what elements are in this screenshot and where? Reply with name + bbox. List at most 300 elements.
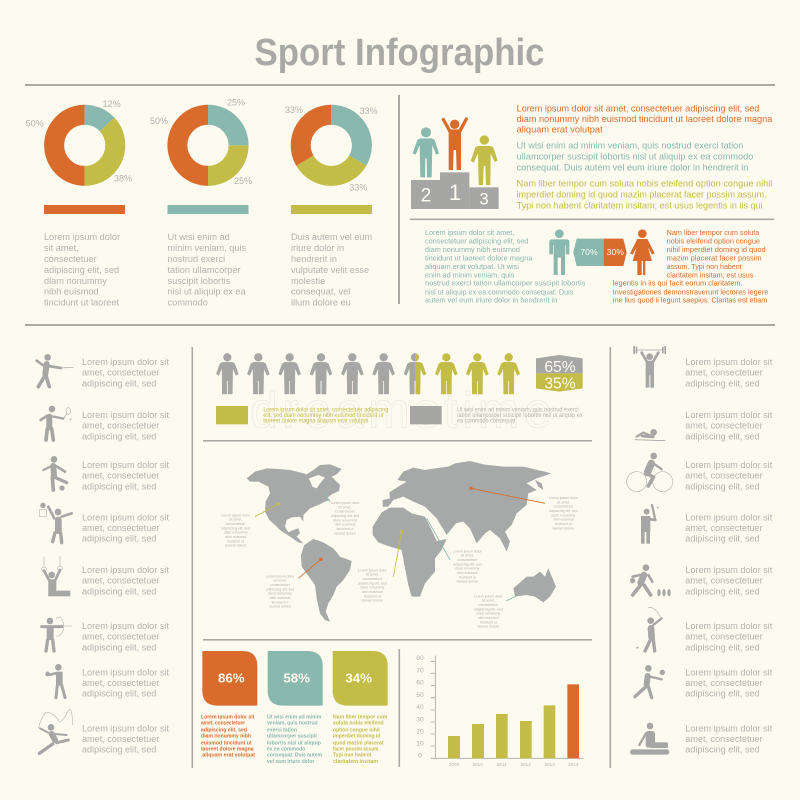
text block olive: [517, 179, 772, 210]
right list upper text: amet, consectetuer: [685, 471, 763, 481]
donut percentage labels: 33%: [360, 106, 378, 116]
left list lower text: adipiscing elit, sed: [82, 586, 156, 596]
map callout text E: tincidunt ut: [459, 575, 476, 579]
map callout text B: diam nonummy: [333, 518, 357, 522]
map callout text B: consectetuer: [335, 510, 356, 514]
left list upper text: amet, consectetuer: [82, 471, 159, 481]
icon: second place figure: [413, 127, 439, 177]
legend olive text: elit, sed diam nonummy nibh euismod tincidunt ut: [263, 413, 384, 419]
percentage badge: 65%: [544, 359, 576, 376]
y axis labels: 80: [416, 655, 424, 662]
right list upper text: adipiscing elit, sed: [685, 378, 760, 388]
donut text column 2: minim veniam, quis: [168, 243, 247, 253]
icon: fencing: [37, 354, 73, 387]
donut text column 1: diam nonummy: [44, 276, 107, 286]
icon: tennis: [41, 406, 71, 440]
stat card 34%: [333, 651, 388, 706]
text block teal: [517, 141, 753, 172]
text block gender orange: nobis eleifend option congue: [667, 236, 760, 245]
map callout text D: Lorem ipsum dolor: [358, 568, 388, 572]
text block gender teal: consectetuer adipiscing elit, sed: [425, 236, 528, 245]
percentage badge: 35%: [544, 376, 576, 393]
stat text orange: amet, consectetuer: [201, 721, 246, 727]
stat text teal: veniam, quis nostrud: [267, 721, 318, 727]
donut text column 3: iriure dolor in: [291, 243, 344, 253]
donut text column 2: suscipit lobortis: [168, 276, 231, 286]
donut percentage labels: [26, 97, 378, 193]
chart axes: [431, 656, 583, 758]
gender ratio badge: [573, 239, 627, 266]
icon: man figure: [549, 229, 569, 275]
donut text column 2: nostrud exerci: [168, 254, 225, 264]
map callout text G: laoreet dolore: [478, 625, 499, 629]
donut text column 2: tation ullamcorper: [168, 265, 241, 275]
stat text teal: lobortis nisl ut aliquip: [267, 740, 322, 746]
left list upper text: Lorem ipsum dolor sit: [82, 460, 169, 470]
right list lower text: adipiscing elit, sed: [685, 689, 760, 699]
map callout text E: consectetuer: [457, 558, 478, 562]
map callout text G: adipiscing elit, sed: [474, 607, 503, 611]
map callout text F: adipiscing elit, sed: [549, 509, 578, 513]
map callout text G: [474, 594, 504, 629]
left list lower text: amet, consectetuer: [82, 734, 159, 744]
donut text column 1: tincidunt ut laoreet: [44, 298, 120, 308]
donut text column 2: nisl ut aliquip ex ea: [168, 287, 247, 297]
icon: rhythmic gymnastics: [38, 710, 73, 753]
donut text column 2: commodo: [168, 298, 208, 308]
panel: right sports list: [627, 346, 773, 755]
stat text teal: exerci tation: [267, 727, 298, 733]
donut text column 3: [291, 232, 373, 308]
colour bar teal: [168, 205, 248, 214]
x axis labels: 2009: [449, 762, 460, 767]
map callout text E: laoreet dolore: [457, 580, 478, 584]
map callout text B: tincidunt ut: [337, 527, 353, 531]
Old world: [373, 461, 556, 602]
donut percentage labels: 50%: [150, 116, 168, 126]
donut text column 1: nibh euismod: [44, 287, 99, 297]
icon: seated fitness: [630, 723, 669, 755]
left list upper text: adipiscing elit, sed: [82, 481, 156, 491]
map callout text F: sit amet,: [557, 500, 570, 504]
text block gender teal: diam nonummy nibh euismod: [425, 245, 520, 254]
text block gender teal: aliquam erat volutpat. Ut wisi: [425, 262, 519, 271]
left list upper text: adipiscing elit, sed: [82, 431, 156, 441]
y axis labels: 10: [416, 741, 424, 748]
map callout text B: Lorem ipsum dolor: [331, 501, 360, 505]
stat text olive: imperdiet doming id: [333, 734, 380, 740]
stat text teal: vel eum iriure dolor: [267, 759, 315, 765]
icon: swimming: [635, 429, 665, 441]
donut text column 2: [168, 232, 247, 308]
map callout text D: diam nonummy: [360, 586, 384, 590]
text block gender orange: Investigationes demonstraverunt lectores legere: [613, 287, 768, 296]
percentage badge: [536, 355, 583, 393]
text block gender teal: [425, 228, 586, 305]
left list upper text: amet, consectetuer: [82, 368, 159, 378]
panel: donut charts: [26, 97, 378, 308]
map callout text C: laoreet dolore: [269, 605, 291, 609]
map callout text G: sit amet,: [482, 599, 495, 603]
map callout text C: tincidunt ut: [272, 600, 288, 604]
donut text column 3: Duis autem vel eum: [291, 232, 373, 242]
stat text teal: [267, 714, 322, 765]
icon: podium: 1: [449, 180, 461, 205]
left list upper text: Lorem ipsum dolor sit: [82, 512, 169, 522]
map callout text E: [453, 549, 483, 584]
donut text column 1: [44, 232, 120, 308]
Africa: [373, 508, 447, 597]
right list lower text: [685, 565, 773, 755]
text block gender teal: nisl ut aliquip ex ea commodo consequat. Duis: [425, 287, 574, 296]
x axis labels: [449, 762, 579, 767]
donut percentage labels: 33%: [285, 105, 303, 115]
map callout text F: laoreet dolore: [553, 526, 574, 530]
donut text column 3: vulputate velit esse: [291, 265, 369, 275]
map callout text A: consectetuer: [226, 522, 246, 526]
bars: [448, 684, 579, 758]
map callout text G: consectetuer: [478, 603, 499, 607]
right list lower text: Lorem ipsum dolor sit: [685, 723, 773, 733]
icon: woman figure: [630, 229, 655, 275]
text block teal: Ut wisi enim ad minim veniam, quis nostrud exerci tation: [517, 141, 743, 151]
map callout text F: nibh euismod: [553, 518, 574, 522]
icon: bowling: [630, 564, 671, 596]
world map: [239, 461, 556, 622]
donut chart 1: [54, 115, 115, 176]
right list lower text: amet, consectetuer: [685, 678, 763, 688]
colour bar olive: [291, 205, 372, 214]
donut percentage labels: 12%: [103, 99, 121, 109]
map callout text C: consectetuer: [270, 583, 291, 587]
stat text orange: adipiscing elit, sed: [201, 727, 247, 733]
stat text teal: consequat. Duis autem: [267, 753, 322, 759]
right list lower text: amet, consectetuer: [685, 576, 763, 586]
icon: volleyball: [635, 665, 665, 698]
right list upper icons: [627, 346, 673, 544]
right list lower icons: [630, 564, 671, 755]
stat text orange: [201, 714, 255, 759]
y axis labels: 50: [416, 692, 424, 699]
Hudson bay cutout: [309, 475, 325, 488]
map callout text E: diam nonummy: [455, 567, 479, 571]
people row pictogram: [216, 353, 520, 394]
text block gender orange: assum. Typi non habent: [667, 262, 742, 271]
map callout text E: sit amet,: [461, 554, 474, 558]
left list lower text: Lorem ipsum dolor sit: [82, 621, 169, 631]
icon: cycling: [627, 453, 673, 492]
map callout text C: nibh euismod: [270, 596, 290, 600]
legend olive text: laoreet dolore magna aliquam erat volutpat: [263, 419, 369, 425]
panel: centre people and map: [216, 353, 583, 629]
right list lower text: amet, consectetuer: [685, 632, 763, 642]
right list lower text: Lorem ipsum dolor sit: [685, 565, 773, 575]
colour bar orange: [44, 205, 125, 214]
legend grey square: [410, 406, 442, 424]
donut percentage labels: 50%: [26, 118, 44, 128]
icon: boxing: [45, 664, 65, 698]
donut text column 1: sit amet,: [44, 243, 79, 253]
map pointers: [255, 487, 545, 601]
text block gender orange: Nam liber tempor cum soluta: [667, 228, 760, 237]
stat text olive: option congue nihil: [333, 727, 380, 733]
donut chart 2: [177, 115, 239, 176]
left list lower text: [82, 565, 169, 755]
left list lower text: adipiscing elit, sed: [82, 642, 156, 652]
text block orange: diam nonummy nibh euismod tincidunt ut laoreet dolore magna: [517, 114, 773, 124]
map callout text C: adipiscing elit, sed: [266, 587, 294, 591]
legend grey text: [457, 407, 583, 425]
x axis labels: 2011: [497, 762, 507, 767]
map callout text C: sit amet,: [273, 579, 287, 583]
right list lower text: adipiscing elit, sed: [685, 586, 760, 596]
donut percentage labels: 33%: [349, 183, 367, 193]
map callout text D: adipiscing elit, sed: [358, 581, 387, 585]
map callout text D: sit amet,: [366, 573, 379, 577]
stat card 34%: 34%: [345, 671, 372, 686]
text block gender orange: nihil imperdiet doming id quod: [667, 245, 766, 254]
right list upper text: adipiscing elit, sed: [685, 431, 760, 441]
gender ratio badge: 30%: [607, 247, 624, 257]
text block orange: Lorem ipsum dolor sit amet, consectetuer adipiscing elit, sed: [517, 103, 759, 113]
map callout text F: diam nonummy: [551, 513, 575, 517]
map callout text C: Lorem ipsum dolor: [266, 574, 295, 578]
stat text olive: quod mazim placerat: [333, 740, 384, 746]
left list upper text: [82, 357, 169, 544]
icon: archery: [42, 617, 72, 651]
map callout text B: adipiscing elit, sed: [331, 514, 359, 518]
bar chart: [416, 655, 583, 767]
left list lower text: adipiscing elit, sed: [82, 745, 156, 755]
Japan: [535, 480, 543, 490]
donut percentage labels: 38%: [114, 173, 132, 183]
panel: bottom stats and bar chart: [201, 651, 583, 767]
text block orange: [517, 103, 773, 135]
icon: podium: 3: [479, 189, 489, 208]
map callout text A: diam nonummy: [224, 531, 248, 535]
right list lower text: adipiscing elit, sed: [685, 745, 760, 755]
y axis labels: 30: [416, 716, 424, 723]
map callout text A: nibh euismod: [225, 535, 246, 539]
stat text olive: [333, 714, 387, 765]
legend olive square: [216, 406, 248, 424]
watermark: dreamstime: [250, 382, 552, 438]
Australia: [513, 568, 556, 602]
left list upper text: Lorem ipsum dolor sit: [82, 357, 169, 367]
right list lower text: Lorem ipsum dolor sit: [685, 621, 773, 631]
donut text column 2: Ut wisi enim ad: [168, 232, 230, 242]
map callout text G: nibh euismod: [478, 616, 499, 620]
right list upper text: amet, consectetuer: [685, 421, 763, 431]
y axis labels: 0: [418, 753, 422, 760]
map callout text B: sit amet,: [338, 505, 352, 509]
x axis labels: 2010: [472, 762, 483, 767]
stat card 58%: 58%: [283, 671, 310, 686]
map callout text A: Lorem ipsum dolor: [221, 513, 251, 517]
map callout text F: [549, 496, 579, 530]
map callout text G: diam nonummy: [476, 612, 500, 616]
icon: third place figure: [471, 135, 498, 185]
map callout text B: [331, 501, 360, 535]
map callout text B: nibh euismod: [335, 523, 355, 527]
title: Sport Infographic: [254, 32, 544, 74]
stat card 86%: [202, 651, 257, 706]
text block gender teal: Lorem ipsum dolor sit amet,: [425, 228, 514, 237]
left list upper text: amet, consectetuer: [82, 421, 159, 431]
y axis labels: 40: [416, 704, 424, 711]
panel: podium and text: [411, 103, 773, 305]
stat text olive: Nam liber tempor cum: [333, 714, 387, 720]
stat text orange: euismod tincidunt ut: [201, 740, 252, 746]
map callout text D: consectetuer: [362, 577, 383, 581]
map callout text D: nibh euismod: [362, 590, 383, 594]
right list upper text: Lorem ipsum dolor sit: [685, 410, 773, 420]
stat card 86%: 86%: [218, 671, 245, 686]
map callout text C: diam nonummy: [268, 592, 292, 596]
map callout text D: laoreet dolore: [362, 599, 383, 603]
donut text column 3: consequat, vel: [291, 287, 350, 297]
left list lower text: amet, consectetuer: [82, 632, 159, 642]
text block gender orange: [613, 228, 768, 305]
donut text column 3: molestie: [291, 276, 325, 286]
donut chart 3: [301, 115, 362, 176]
map callout text A: tincidunt ut: [227, 539, 244, 543]
legend grey text: ea commodo consequat: [457, 419, 516, 425]
icon: golf: [636, 607, 662, 651]
legend grey text: Ut wisi enim ad minim veniam, quis nostrud exerci: [457, 407, 579, 413]
stat text teal: ex ea commodo: [267, 746, 306, 752]
left list lower icons: [38, 556, 73, 753]
text block olive: Nam liber tempor cum soluta nobis eleifend option congue nihil: [517, 179, 772, 189]
icon: basketball: [40, 503, 72, 543]
right list upper text: Lorem ipsum dolor sit: [685, 460, 773, 470]
map callout text E: adipiscing elit, sed: [453, 562, 482, 566]
icon: podium: [411, 172, 499, 209]
donut text column 1: adipiscing elit, sed: [44, 265, 119, 275]
text block teal: ullamcorper suscipit lobortis nisl ut aliquip ex ea commodo: [517, 152, 753, 162]
icon: gymnastic rings: [42, 556, 70, 596]
icon: weightlifting: [633, 346, 666, 388]
stat text orange: laoreet dolore magna: [201, 746, 255, 752]
left list upper icons: [37, 354, 73, 543]
right list lower text: adipiscing elit, sed: [685, 642, 760, 652]
map callout text C: [266, 574, 295, 609]
left list lower text: amet, consectetuer: [82, 576, 159, 586]
donut text column 1: Lorem ipsum dolor: [44, 232, 120, 242]
y axis labels: 60: [416, 680, 424, 687]
North America: [239, 464, 342, 543]
map callout text G: tincidunt ut: [480, 620, 497, 624]
map callout text A: laoreet dolore: [225, 544, 246, 548]
stat text orange: diam nonummy nibh: [201, 734, 252, 740]
icon: soccer: [43, 456, 67, 491]
text block orange: aliquam erat volutpat: [517, 125, 603, 135]
map callout text D: tincidunt ut: [364, 594, 381, 598]
y axis labels: 70: [416, 667, 424, 674]
map callout text A: sit amet,: [229, 518, 242, 522]
donut text column 1: consectetuer: [44, 254, 97, 264]
right list lower text: Lorem ipsum dolor sit: [685, 667, 773, 677]
map callout text A: adipiscing elit, sed: [221, 526, 250, 530]
Americas: [239, 464, 352, 622]
map callout text F: Lorem ipsum dolor: [549, 496, 579, 500]
map callout text E: Lorem ipsum dolor: [453, 549, 483, 553]
stat text orange: .aliquam erat volutpat: [201, 753, 255, 759]
stat text olive: soluta nobis eleifend: [333, 721, 384, 727]
map callout text B: laoreet dolore: [334, 531, 356, 535]
y axis labels: [416, 655, 424, 760]
left list upper text: adipiscing elit, sed: [82, 378, 156, 388]
map callout text D: [358, 568, 388, 603]
text block teal: consequat. Duis autem vel eum iriure dolor in hendrerit in: [517, 162, 748, 172]
right list upper text: Lorem ipsum dolor sit: [685, 357, 773, 367]
right list upper text: Lorem ipsum dolor sit: [685, 512, 773, 522]
left list lower text: adipiscing elit, sed: [82, 689, 156, 699]
map callout text A: [221, 513, 251, 548]
map callout text G: Lorem ipsum dolor: [474, 594, 504, 598]
icon: first place figure: [441, 117, 468, 170]
text block gender teal: autem vel eum iriure dolor in hendrerit in: [425, 296, 557, 305]
text block gender orange: mazim placerat facer possim: [667, 253, 762, 262]
stat text olive: Typi non habent: [333, 753, 371, 759]
left list lower text: amet, consectetuer: [82, 678, 159, 688]
stat text olive: facer possim assum.: [333, 746, 380, 752]
right list upper text: amet, consectetuer: [685, 523, 763, 533]
map callout text F: consectetuer: [553, 505, 574, 509]
stat text teal: Ut wisi enim ad minim: [267, 714, 321, 720]
left list upper text: Lorem ipsum dolor sit: [82, 410, 169, 420]
legend grey text: tation ullamcorper suscipit lobortis nisl ut aliquip ex: [457, 413, 583, 419]
map callout text E: nibh euismod: [457, 571, 478, 575]
left list upper text: amet, consectetuer: [82, 523, 159, 533]
left list upper text: adipiscing elit, sed: [82, 534, 156, 544]
panel: left sports list: [37, 354, 169, 755]
text block gender teal: tincidunt ut laoreet dolore magna: [425, 253, 533, 262]
x axis labels: 2014: [568, 762, 579, 767]
right list upper text: [685, 357, 773, 544]
legend olive text: Lorem ipsum dolor sit amet, consectetuer adipiscing: [263, 407, 388, 413]
South America: [301, 539, 352, 622]
x axis labels: 2012: [520, 762, 531, 767]
left list lower text: Lorem ipsum dolor sit: [82, 723, 169, 733]
right list lower text: amet, consectetuer: [685, 734, 763, 744]
text block olive: Typi non habent claritatem insitam; est usus legentis in iis qui: [517, 200, 763, 210]
donut text column 3: illum dolore eu: [291, 298, 351, 308]
text block gender orange: legentis in iis qui facit eorum claritatem.: [613, 279, 743, 288]
left list lower text: Lorem ipsum dolor sit: [82, 667, 169, 677]
text block gender orange: claritatem insitam; est usus: [667, 270, 754, 279]
map callout text F: tincidunt ut: [555, 522, 572, 526]
donut percentage labels: 25%: [227, 97, 245, 107]
stat text teal: ullamcorper suscipit: [267, 734, 317, 740]
right list upper text: adipiscing elit, sed: [685, 481, 760, 491]
stat card 58%: [268, 651, 323, 706]
donut percentage labels: 25%: [234, 176, 252, 186]
stat text orange: Lorem ipsum dolor sit: [201, 714, 254, 720]
donut text column 3: hendrerit in: [291, 254, 337, 264]
x axis labels: 2013: [544, 762, 555, 767]
text block gender teal: nostrud exerci tation ullamcorper suscipit lobortis: [425, 279, 586, 288]
left list lower text: Lorem ipsum dolor sit: [82, 565, 169, 575]
icon: baseball: [641, 505, 658, 544]
stat text olive: claritatem insitam: [333, 759, 378, 765]
gender ratio badge: 70%: [580, 247, 598, 257]
legend olive text: [263, 407, 388, 425]
y axis labels: 20: [416, 728, 424, 735]
text block gender teal: enim ad minim veniam, quis: [425, 270, 515, 279]
Eurasia: [383, 461, 552, 552]
right list upper text: amet, consectetuer: [685, 368, 763, 378]
